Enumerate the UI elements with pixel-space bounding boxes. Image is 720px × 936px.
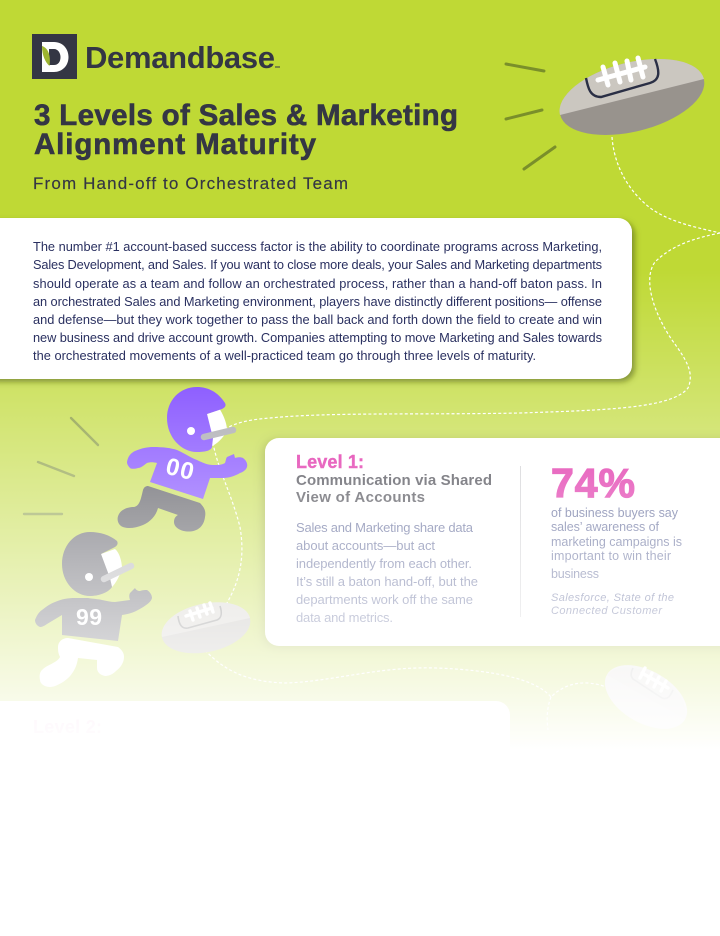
level 1 description: departments work off the same (296, 592, 473, 607)
facemask (104, 566, 131, 579)
dashed ball flight path (205, 137, 720, 730)
stat source: Salesforce, State of the (551, 592, 674, 604)
logo leaf (42, 46, 50, 66)
ball dark half (552, 46, 712, 148)
title: 3 Levels of Sales & Marketing (34, 99, 458, 132)
facemask (204, 430, 233, 437)
player 99 in grey (35, 532, 152, 687)
jersey and arms (35, 588, 152, 641)
ball light half (560, 59, 704, 115)
subtitle: From Hand-off to Orchestrated Team (33, 174, 348, 193)
laces (186, 603, 213, 620)
ball dark half (594, 652, 698, 742)
intro text: an orchestrated Sales and Marketing environment, players have distinctly different positions— offense (33, 294, 602, 309)
level 2 heading: Level 2: (33, 717, 102, 737)
ball seam (586, 59, 658, 97)
stat description: business (551, 567, 599, 581)
player 00 in purple (118, 387, 247, 532)
stat 74%: 74% (551, 460, 635, 506)
jersey and arms (127, 447, 247, 499)
stat source: Connected Customer (551, 605, 663, 617)
logo mark square (32, 34, 77, 79)
panel: intro card (0, 218, 632, 379)
eye (85, 573, 93, 581)
level 1 description: independently from each other. (296, 556, 472, 571)
motion lines near players (24, 418, 98, 514)
pants (118, 486, 205, 532)
level 1 description: It’s still a baton hand-off, but the (296, 574, 478, 589)
stat description: marketing campaigns is (551, 535, 682, 549)
level 1 subheading (296, 472, 492, 506)
level 1 subheading: Communication via Shared (296, 472, 492, 489)
level 1 description (296, 520, 478, 625)
trademark (275, 66, 280, 68)
face (207, 410, 227, 446)
card 2 shape (0, 701, 510, 921)
jersey number: 00 (163, 453, 197, 486)
intro text (33, 239, 602, 363)
motion lines near top football (506, 64, 555, 169)
white fade overlay (0, 270, 720, 936)
panel: level 1 card (265, 438, 720, 646)
football near players (157, 595, 255, 661)
stat description: important to win their (551, 549, 671, 563)
ball light half (162, 602, 250, 637)
logo D (42, 42, 68, 72)
ball light half (607, 667, 686, 719)
intro text: The number #1 account-based success factor is the ability to coordinate programs across Marketing, (33, 239, 602, 254)
face (101, 549, 122, 587)
logo wordmark: Demandbase (85, 40, 275, 75)
stat description (551, 506, 682, 581)
helmet (167, 387, 226, 452)
divider (520, 466, 522, 617)
pants (40, 638, 124, 687)
title: Alignment Maturity (34, 128, 317, 161)
stat source (551, 592, 674, 617)
level 1 subheading: View of Accounts (296, 489, 425, 506)
level 1 description: data and metrics. (296, 610, 393, 625)
ball seam (178, 606, 221, 628)
level 1 heading: Level 1: (296, 452, 364, 472)
ball seam (631, 668, 673, 699)
eye (187, 427, 195, 435)
laces (598, 58, 645, 85)
intro text: and defense—but they work together to pass the ball back and forth down the field to create and win (33, 312, 602, 327)
intro text: new business and drive account growth. Companies attempting to move Marketing and Sales towards (33, 330, 602, 345)
jersey number: 99 (76, 604, 102, 630)
level 1 description: Sales and Marketing share data (296, 520, 474, 535)
panel: level 2 card (0, 701, 510, 921)
intro text: Sales Development, and Sales. If you want to close more deals, your Sales and Marketing departments (33, 257, 602, 272)
card 1 shape (265, 438, 720, 646)
stat description: of business buyers say (551, 506, 679, 520)
title (34, 99, 458, 161)
top football (552, 46, 712, 148)
ball dark half (157, 595, 255, 661)
level 1 description: about accounts—but act (296, 538, 435, 553)
intro text: should operate as a team and follow an orchestrated process, rather than a hand-off baton pass. In (33, 276, 602, 291)
intro card shape (0, 218, 632, 379)
laces (640, 668, 668, 691)
stat description: sales’ awareness of (551, 520, 660, 534)
helmet (62, 532, 118, 596)
intro text: the orchestrated movements of a well-practiced team go through three levels of maturity. (33, 348, 536, 363)
fading football bottom right (594, 652, 698, 742)
logo (32, 34, 280, 79)
